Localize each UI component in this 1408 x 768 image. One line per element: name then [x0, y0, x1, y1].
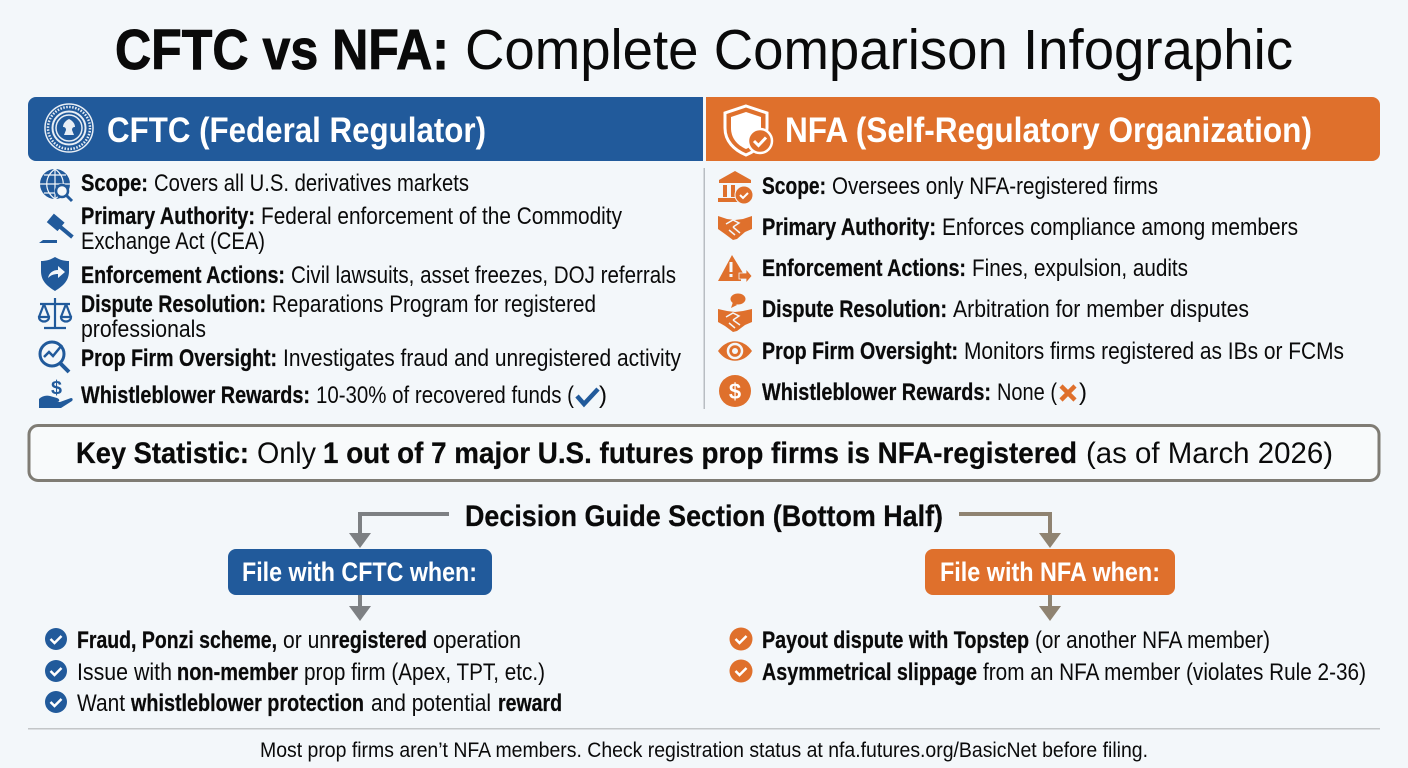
heading: decision guide: Decision Guide Section (Bottom Half) [465, 500, 943, 533]
item: fraud: operation [433, 627, 521, 654]
arrow: to NFA button [959, 514, 1061, 548]
list: file with NFA reasons [730, 627, 1366, 686]
item: non-member: Issue with [77, 659, 172, 686]
item: whistleblower: whistleblower protection [130, 690, 364, 717]
panel: file with NFA button [925, 549, 1175, 595]
item: fraud: registered [331, 627, 427, 654]
row: CFTC whistleblower rewards [39, 378, 607, 409]
item: payout dispute [730, 627, 1270, 654]
row: NFA dispute resolution: Arbitration for member disputes [953, 296, 1249, 323]
panel: CFTC header: CFTC (Federal Regulator) [107, 111, 486, 150]
row: CFTC primary authority: Federal enforcement of the Commodity [261, 203, 622, 230]
row: NFA scope: Oversees only NFA-registered firms [832, 173, 1158, 200]
row: NFA enforcement actions: Enforcement Actions: [762, 255, 966, 282]
icon: CFTC seal [45, 104, 93, 152]
row: CFTC dispute resolution: Dispute Resolution: [81, 291, 266, 318]
row: CFTC whistleblower rewards: ) [599, 382, 607, 409]
row: CFTC scope [40, 169, 469, 201]
callout: key statistic [29, 426, 1379, 480]
row: NFA whistleblower rewards [719, 375, 1087, 407]
title [115, 18, 1293, 82]
item: slippage: Asymmetrical slippage [762, 659, 977, 686]
item: non-member: non-member [177, 659, 298, 686]
item: whistleblower: and potential [371, 690, 491, 717]
callout: key statistic: 1 out of 7 major U.S. futures prop firms is NFA-registered [323, 437, 1077, 470]
item: non-member [45, 659, 545, 686]
item: payout dispute: Payout dispute with Topstep [762, 627, 1029, 654]
callout: key statistic: Only [257, 437, 316, 470]
row: CFTC enforcement actions: Civil lawsuits, asset freezes, DOJ referrals [291, 262, 676, 289]
icon: NFA shield with check [725, 106, 772, 155]
row: NFA prop firm oversight: Monitors firms registered as IBs or FCMs [964, 338, 1344, 365]
row: CFTC enforcement actions: Enforcement Actions: [81, 262, 285, 289]
item: fraud: Fraud, Ponzi scheme, [77, 627, 277, 654]
panel: NFA header [706, 97, 1380, 161]
row: NFA scope: Scope: [762, 173, 826, 200]
row: NFA dispute resolution: Dispute Resolution: [762, 296, 947, 323]
callout: key statistic: Key Statistic: [76, 437, 249, 470]
row: CFTC whistleblower rewards: 10-30% of recovered funds ( [316, 382, 574, 409]
row: NFA primary authority: Enforces compliance among members [942, 214, 1298, 241]
icon: blue check [577, 389, 598, 404]
row: NFA enforcement actions: Fines, expulsion, audits [972, 255, 1188, 282]
row: CFTC dispute resolution: professionals [81, 316, 206, 343]
arrow: to CFTC button [349, 514, 449, 548]
row: CFTC whistleblower rewards: $ [51, 378, 62, 399]
item: payout dispute: (or another NFA member) [1035, 627, 1270, 654]
item: whistleblower: reward [498, 690, 562, 717]
row: CFTC primary authority: Primary Authority: [81, 203, 255, 230]
item: whistleblower [45, 690, 562, 717]
panel: CFTC details [39, 169, 681, 409]
arrow: NFA button to list [1039, 595, 1061, 621]
row: NFA dispute resolution [718, 294, 1249, 332]
row: CFTC primary authority [39, 203, 622, 255]
row: CFTC scope: Covers all U.S. derivatives markets [154, 170, 469, 197]
row: CFTC primary authority: Exchange Act (CEA) [81, 228, 265, 255]
row: CFTC enforcement actions [41, 257, 676, 291]
panel: NFA details [704, 168, 1344, 409]
list: file with CFTC reasons [45, 627, 562, 717]
arrow: CFTC button to list [349, 595, 371, 621]
panel: file with NFA button: File with NFA when: [940, 557, 1160, 587]
panel: file with CFTC button [228, 549, 492, 595]
row: CFTC dispute resolution [39, 291, 596, 343]
row: CFTC whistleblower rewards: Whistleblower Rewards: [81, 382, 310, 409]
title: CFTC vs NFA: [115, 18, 449, 82]
row: CFTC prop firm oversight: Investigates fraud and unregistered activity [283, 345, 681, 372]
panel: NFA header: NFA (Self-Regulatory Organization) [785, 111, 1312, 150]
callout: key statistic: (as of March 2026) [1086, 437, 1333, 470]
item: slippage [730, 659, 1366, 686]
row: NFA enforcement actions [718, 255, 1188, 283]
panel: file with CFTC button: File with CFTC when: [242, 557, 477, 587]
row: NFA scope [718, 171, 1158, 204]
panel: CFTC header [28, 97, 703, 161]
row: NFA prop firm oversight [718, 338, 1344, 365]
row: CFTC prop firm oversight: Prop Firm Oversight: [81, 345, 277, 372]
icon: orange cross [1061, 386, 1075, 400]
title: Complete Comparison Infographic [465, 18, 1293, 82]
row: NFA whistleblower rewards: None ( [997, 379, 1057, 406]
item: non-member: prop firm (Apex, TPT, etc.) [304, 659, 545, 686]
row: CFTC prop firm oversight [40, 342, 681, 372]
item: fraud: or un [283, 627, 331, 654]
row: CFTC dispute resolution: Reparations Program for registered [272, 291, 596, 318]
row: NFA whistleblower rewards: ) [1079, 379, 1087, 406]
row: CFTC scope: Scope: [81, 170, 148, 197]
row: NFA whistleblower rewards: $ [729, 379, 741, 404]
item: whistleblower: Want [77, 690, 125, 717]
row: NFA primary authority [718, 214, 1298, 241]
footer note: Most prop firms aren’t NFA members. Check registration status at nfa.futures.org/BasicNet before filing. [260, 739, 1148, 762]
row: NFA prop firm oversight: Prop Firm Oversight: [762, 338, 958, 365]
row: NFA primary authority: Primary Authority: [762, 214, 936, 241]
row: NFA whistleblower rewards: Whistleblower Rewards: [762, 379, 991, 406]
item: fraud [45, 627, 521, 654]
